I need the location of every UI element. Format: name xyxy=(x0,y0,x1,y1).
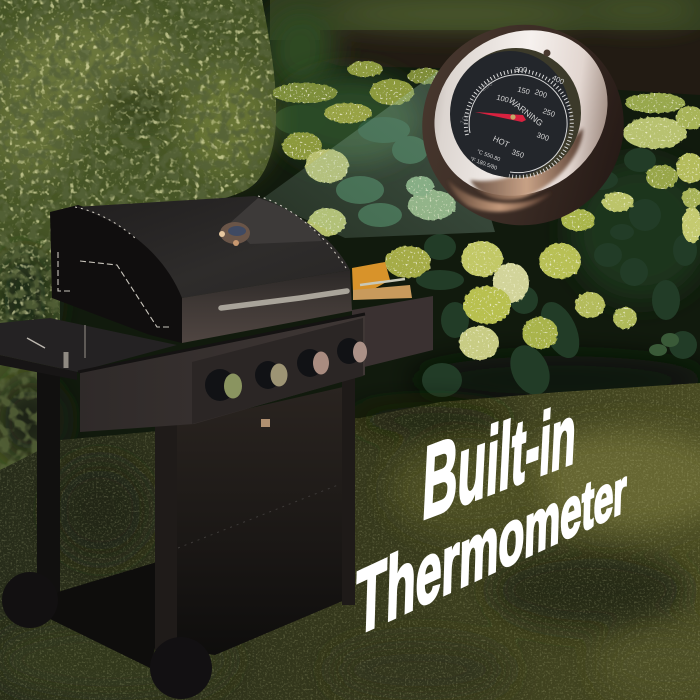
lawn xyxy=(0,383,700,700)
dial labels: 100 xyxy=(495,93,510,105)
chrome bezel xyxy=(402,0,640,229)
word: Built-in: Built-in xyxy=(420,369,579,543)
needle hub xyxy=(510,114,516,120)
hood edge dashes xyxy=(75,196,346,268)
bezel reflection xyxy=(470,128,583,200)
cabinet seam xyxy=(178,485,338,548)
panel recess xyxy=(192,318,363,424)
right wheel xyxy=(150,637,212,699)
panel top lip xyxy=(78,314,365,372)
side shelf grate xyxy=(27,325,85,368)
dial labels: 400 xyxy=(550,73,566,86)
background: hydrangea leaves xyxy=(274,105,697,401)
background: hydrangea flowers xyxy=(272,61,700,360)
front leg xyxy=(155,405,177,650)
inner rim xyxy=(451,48,581,178)
background: hedge xyxy=(0,0,276,478)
dial labels: WARNING xyxy=(507,95,545,128)
thermometer callout xyxy=(386,0,660,262)
right cabinet post xyxy=(342,375,355,605)
knob 2 xyxy=(255,361,288,389)
callout wedge linking grill lid to thermometer xyxy=(262,66,495,238)
dial labels: 300 xyxy=(535,130,550,143)
dial labels: 300 xyxy=(515,65,527,74)
brand mark xyxy=(261,419,270,427)
hood highlight facet xyxy=(230,198,322,244)
control panel xyxy=(80,315,365,432)
lower shelf xyxy=(48,562,157,668)
background: garden foliage xyxy=(0,0,700,440)
left wheel xyxy=(2,572,58,628)
dial labels: 350 xyxy=(510,147,525,160)
word: Thermometer: Thermometer xyxy=(354,428,628,657)
hood lid bracket lines xyxy=(58,252,169,327)
dial labels: HOT xyxy=(492,134,511,149)
knob 3 xyxy=(297,349,329,377)
hood top xyxy=(75,196,350,298)
shell reflection xyxy=(448,180,552,212)
dial labels: °C 550.80 xyxy=(476,149,501,163)
dial ticks xyxy=(466,71,572,177)
dial labels: 100 xyxy=(458,111,472,126)
hood handle xyxy=(221,291,347,308)
dial labels: 200 xyxy=(479,79,494,93)
dial labels: 200 xyxy=(533,87,548,100)
thermometer shell xyxy=(386,0,660,262)
dial labels: 150 xyxy=(516,85,531,97)
dial labels: °F 180.5/80 xyxy=(469,156,498,172)
mounting hole xyxy=(544,50,550,56)
left back leg xyxy=(37,370,60,595)
knob 4 xyxy=(337,338,367,364)
food on side tray xyxy=(352,262,412,300)
dial labels xyxy=(458,65,566,172)
dial labels: 250 xyxy=(541,106,556,119)
headline: Built-in Thermometer xyxy=(354,369,628,657)
hood front band xyxy=(182,270,352,343)
gauge face xyxy=(450,51,570,177)
knob 1 xyxy=(205,369,242,401)
left side panel front xyxy=(0,355,77,380)
cabinet body xyxy=(176,385,352,655)
right side shelf xyxy=(352,296,433,370)
hood side xyxy=(50,205,182,343)
left side shelf xyxy=(0,318,177,372)
needle xyxy=(475,112,526,122)
hood knob xyxy=(219,222,250,246)
gas grill xyxy=(0,196,433,699)
